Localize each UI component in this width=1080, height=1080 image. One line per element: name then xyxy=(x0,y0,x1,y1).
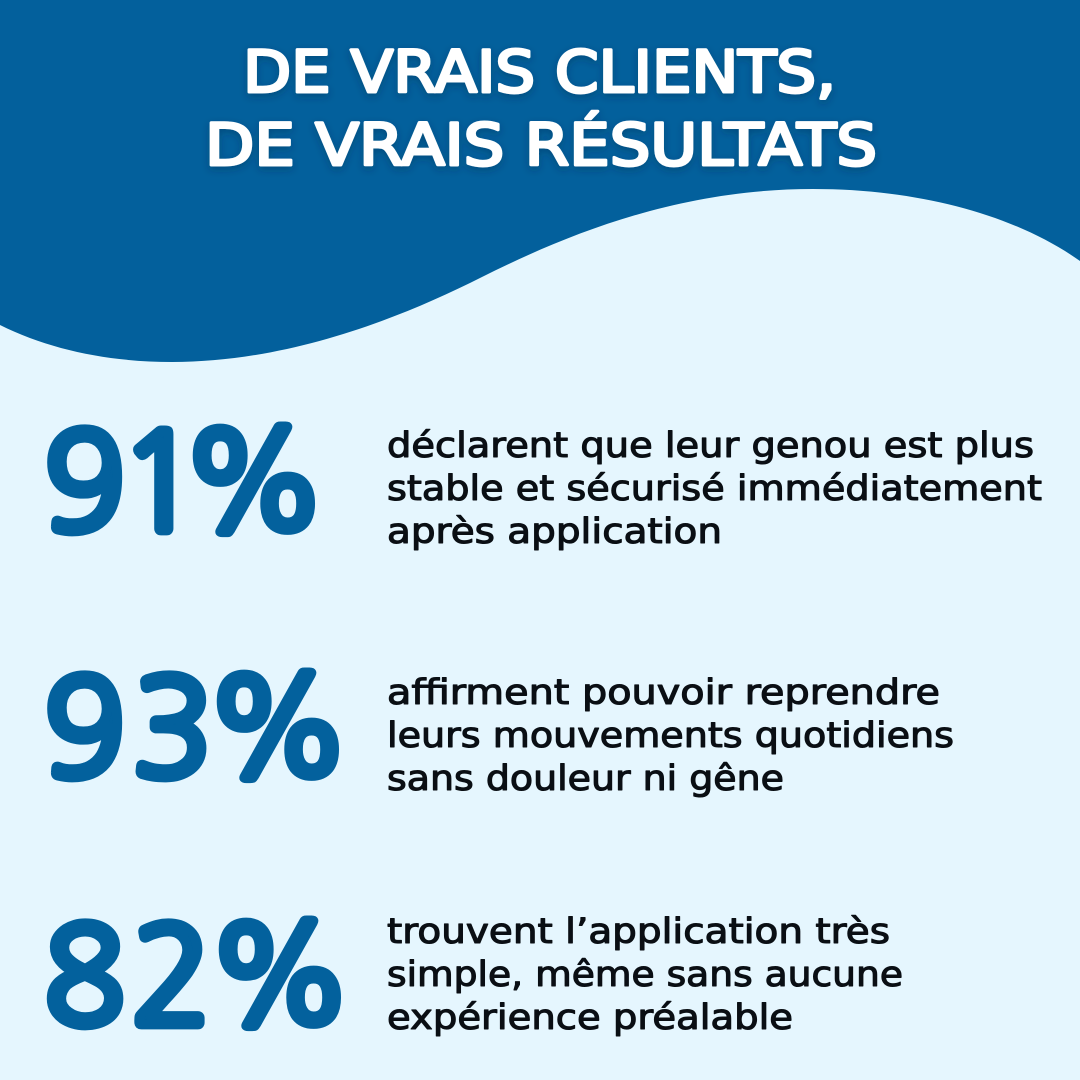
header wave xyxy=(0,0,1080,362)
description: 93%: sans douleur ni gêne xyxy=(387,759,784,799)
description: 82% xyxy=(387,912,903,1038)
description: 93% xyxy=(387,673,954,799)
description: 82%: expérience préalable xyxy=(387,998,793,1038)
stat: 93% xyxy=(44,662,954,799)
description: 91%: déclarent que leur genou est plus xyxy=(387,426,1034,466)
description: 82%: trouvent l’application très xyxy=(387,912,890,952)
description: 93%: affirment pouvoir reprendre xyxy=(387,673,940,713)
stat: 91% xyxy=(44,416,1042,552)
number: 91%: 91% xyxy=(44,416,327,550)
description: 91%: après application xyxy=(387,512,722,552)
title xyxy=(205,38,877,179)
number: 82%: 82% xyxy=(44,910,353,1044)
description: 91% xyxy=(387,426,1042,552)
description: 93%: leurs mouvements quotidiens xyxy=(387,716,954,756)
description: 82%: simple, même sans aucune xyxy=(387,955,903,995)
number: 93%: 93% xyxy=(44,662,351,796)
title: DE VRAIS CLIENTS, xyxy=(243,38,836,106)
title: DE VRAIS RÉSULTATS xyxy=(205,110,877,179)
stat: 82% xyxy=(44,910,903,1044)
description: 91%: stable et sécurisé immédiatement xyxy=(387,469,1042,509)
